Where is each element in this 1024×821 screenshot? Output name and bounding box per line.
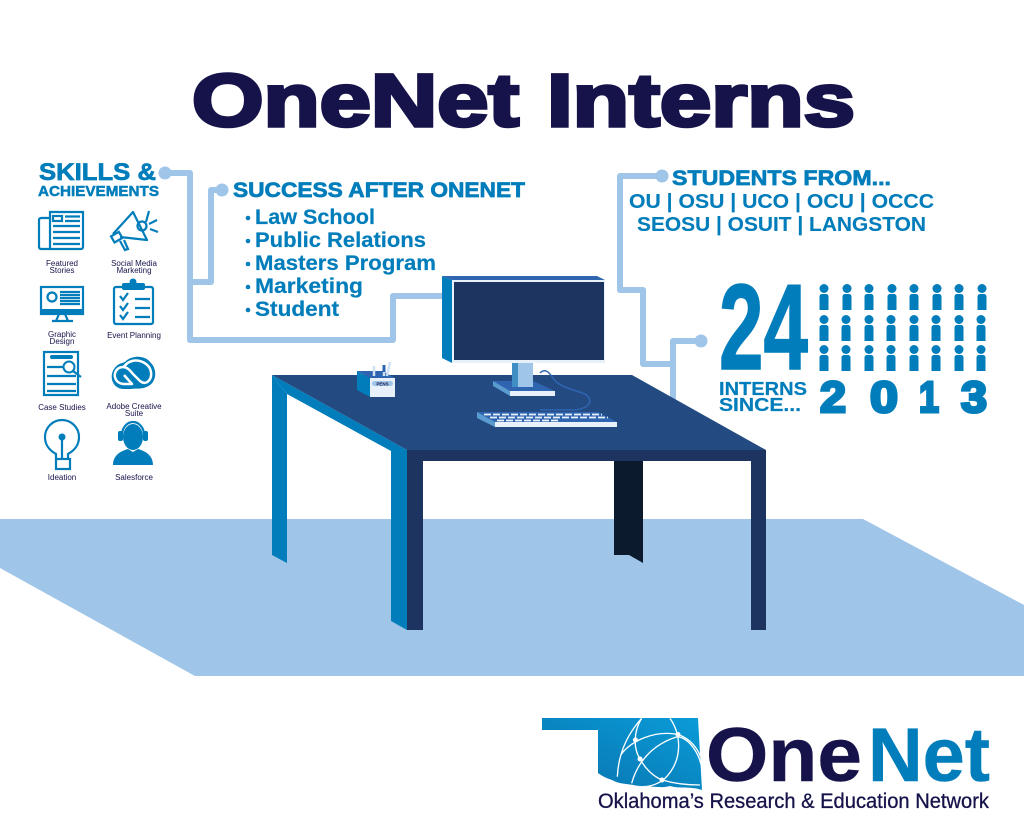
success list: Masters Program	[255, 252, 436, 275]
cable	[540, 371, 590, 410]
schools list	[629, 191, 934, 236]
logo wordmark	[706, 713, 990, 798]
icon: graphic design: Graphic	[48, 330, 76, 339]
connector: skills and success lines	[158, 166, 444, 340]
monitor	[442, 276, 605, 410]
label: interns since: SINCE...	[719, 395, 801, 415]
icon: social media marketing: Social Media	[111, 259, 157, 268]
logo tagline: Oklahoma’s Research & Education Network	[598, 790, 989, 813]
stat: 2013: 0	[870, 373, 898, 422]
icon: salesforce	[113, 422, 153, 482]
label: interns since: INTERNS	[719, 379, 807, 399]
success list: Law School	[255, 206, 375, 229]
icon: case studies: Case Studies	[38, 403, 86, 412]
icon: salesforce: Salesforce	[115, 473, 153, 482]
success heading: SUCCESS AFTER ONENET	[233, 179, 525, 202]
stat: 2013: 1	[919, 373, 939, 422]
success list: Public Relations	[255, 229, 426, 252]
panel: success after onenet	[233, 179, 525, 321]
icon: featured stories	[39, 212, 83, 275]
monitor stand	[493, 363, 555, 396]
stat: 2013	[820, 373, 987, 422]
icon: featured stories: Stories	[50, 266, 74, 275]
icon: event planning: Event Planning	[107, 331, 161, 340]
stat: 24: 24	[719, 259, 808, 395]
icon: ideation: Ideation	[48, 473, 76, 482]
floor	[0, 519, 1024, 676]
keyboard	[477, 412, 617, 427]
panel: intern stats	[719, 259, 987, 422]
stat: 2013: 3	[961, 373, 987, 422]
label: interns since	[719, 379, 807, 415]
pictogram: 24 interns	[820, 284, 986, 371]
skills heading: ACHIEVEMENTS	[38, 183, 159, 200]
success list	[246, 206, 436, 321]
icon: event planning	[107, 278, 161, 340]
stat: 2013: 2	[820, 373, 846, 422]
desk	[272, 375, 766, 630]
icon: adobe creative suite: Adobe Creative	[106, 402, 162, 411]
logo: onenet	[542, 713, 990, 813]
title: Interns	[547, 59, 855, 142]
icon: case studies	[38, 352, 86, 412]
icon: adobe creative suite: Suite	[125, 409, 144, 418]
panel: skills and achievements	[38, 159, 162, 482]
panel: students from	[629, 167, 934, 236]
icon: featured stories: Featured	[46, 259, 78, 268]
icon: ideation	[45, 420, 79, 482]
skills heading: SKILLS &	[39, 159, 156, 186]
logo wordmark: One	[706, 713, 862, 798]
title	[192, 59, 855, 142]
success list: Marketing	[255, 275, 363, 298]
pen holder	[357, 362, 395, 397]
pen holder: PENS	[376, 382, 389, 386]
title: OneNet	[192, 59, 519, 142]
icon: social media marketing: Marketing	[116, 266, 152, 275]
icon: oklahoma network map	[542, 718, 702, 790]
success list: Student	[255, 298, 339, 321]
icon: graphic design	[41, 287, 83, 346]
schools list: SEOSU | OSUIT | LANGSTON	[637, 214, 926, 236]
icon: adobe creative suite	[106, 357, 162, 418]
icon: social media marketing	[111, 211, 158, 275]
skills heading	[38, 159, 159, 200]
students heading: STUDENTS FROM...	[672, 167, 891, 190]
connector: students and interns lines	[620, 170, 708, 400]
schools list: OU | OSU | UCO | OCU | OCCC	[629, 191, 934, 213]
icon: graphic design: Design	[50, 337, 74, 346]
logo wordmark: Net	[868, 713, 990, 798]
